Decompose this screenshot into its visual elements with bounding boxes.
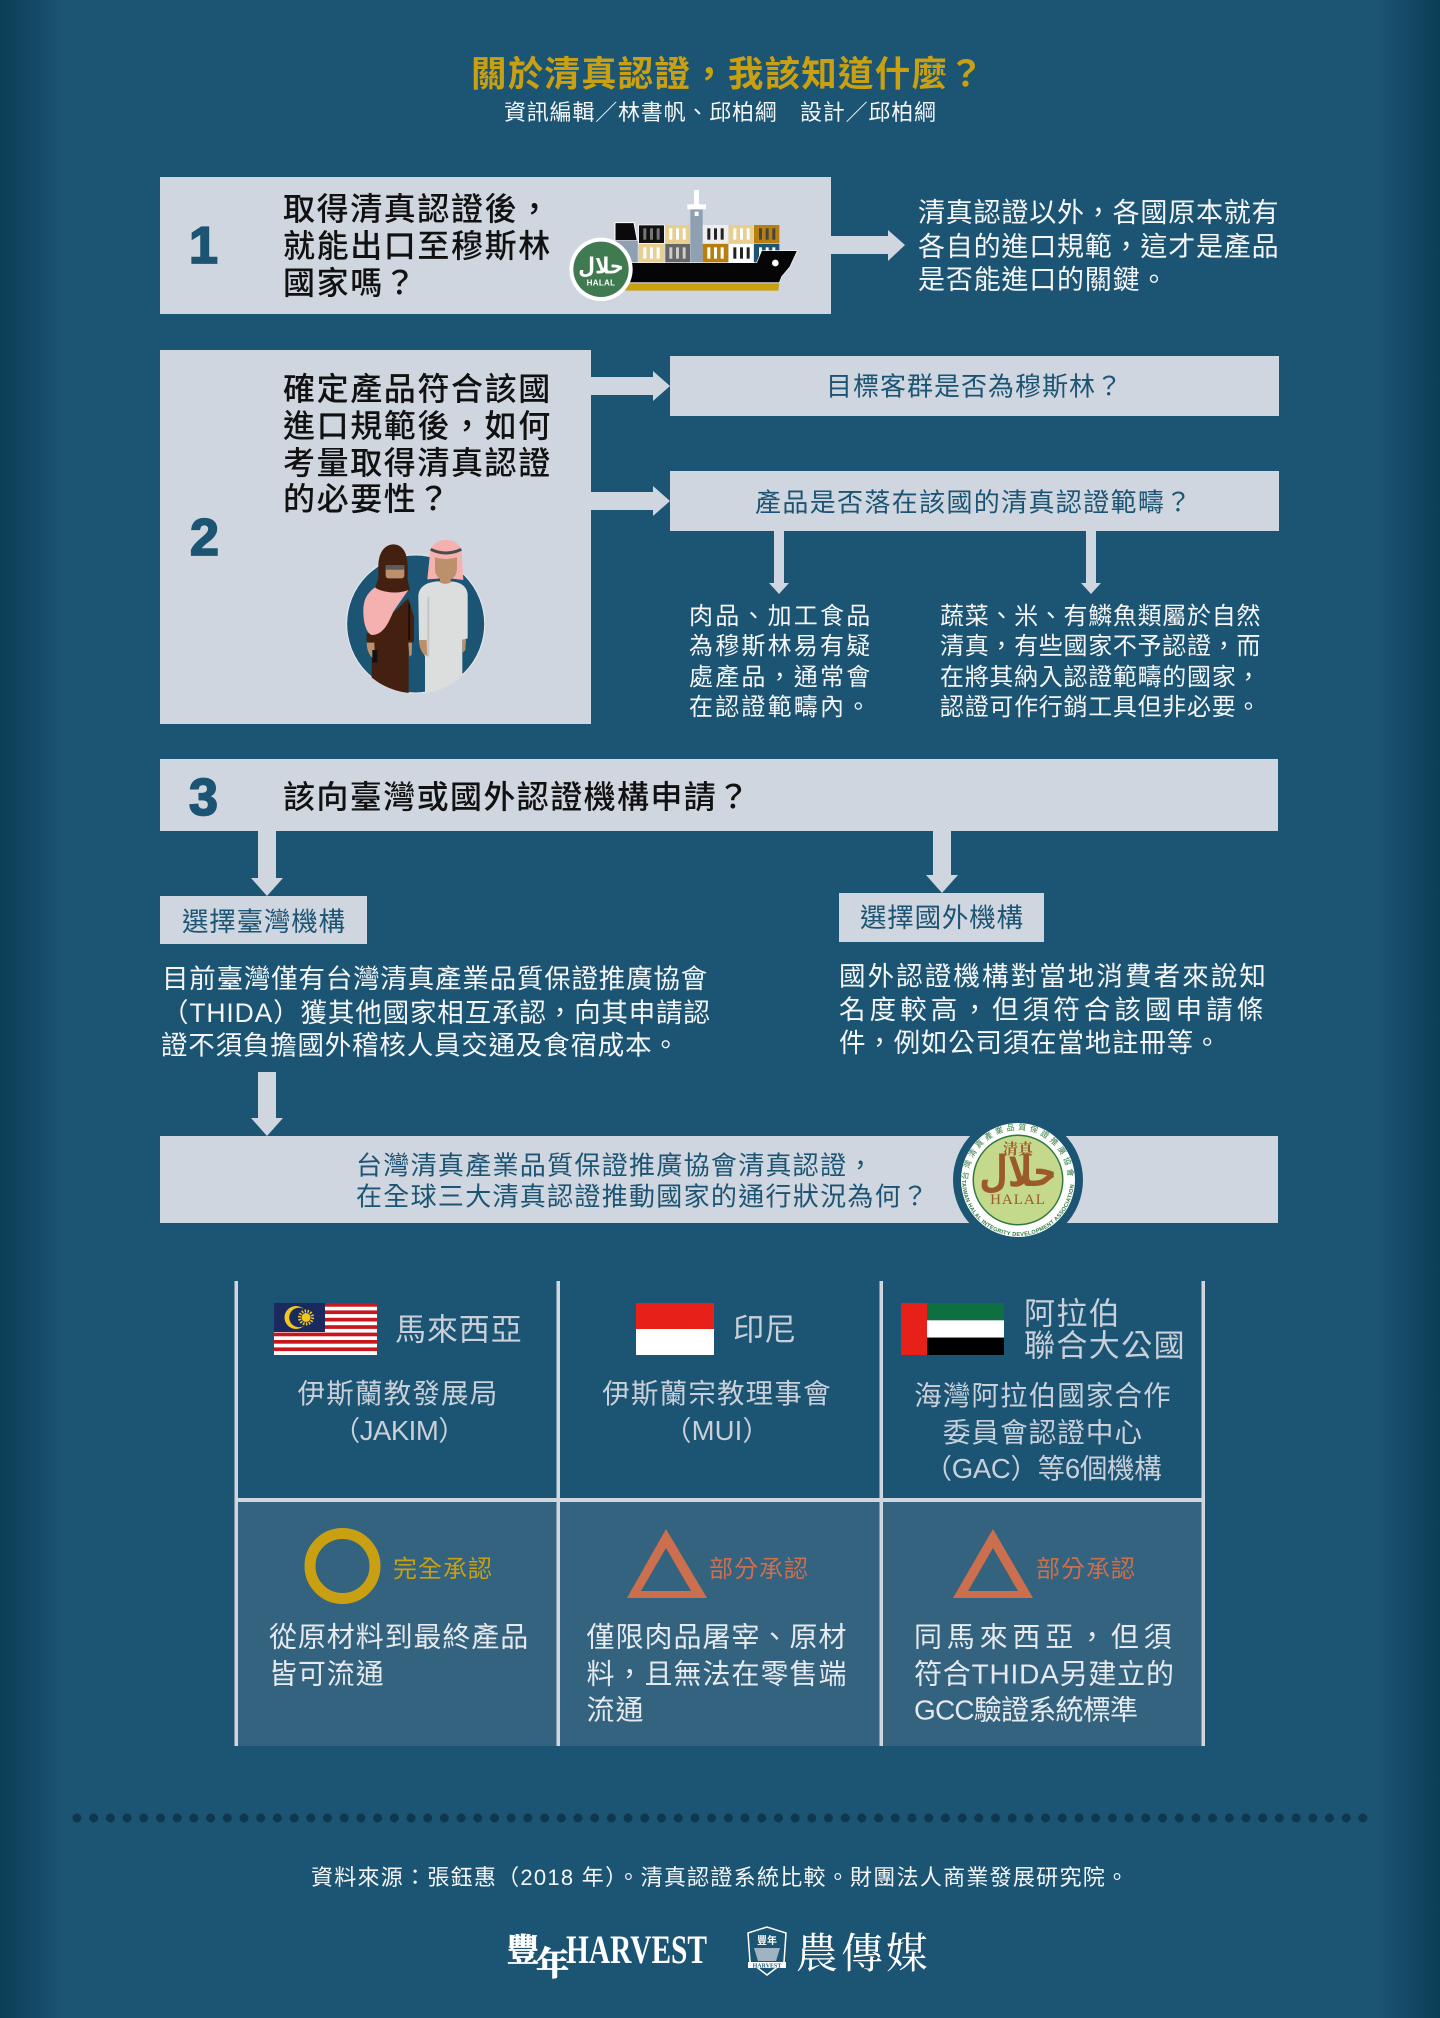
label box: foreign institutions xyxy=(839,893,1044,942)
text: Indonesia recognition: 流通 xyxy=(586,1694,645,1726)
certifier: JAKIM: 伊斯蘭教發展局 xyxy=(298,1378,498,1409)
logo: THIDA halal seal: 台灣清真產業品質保證推廣協會 xyxy=(961,1123,1074,1179)
text: meat products xyxy=(689,603,872,721)
icon: cargo ship with halal badge xyxy=(569,190,797,301)
text: foreign institutions xyxy=(839,962,1268,1058)
question 1 text: 取得清真認證後， xyxy=(283,191,552,227)
question 3 text: 該向臺灣或國外認證機構申請？ xyxy=(283,779,751,815)
title: 關於清真認證，我該知道什麼？ xyxy=(471,54,985,94)
question 2 text xyxy=(283,371,552,517)
certifier: GAC: （GAC）等6個機構 xyxy=(925,1453,1161,1484)
text: Taiwan institutions xyxy=(161,964,710,1060)
flag: Malaysia xyxy=(274,1303,377,1355)
arrow: to target customers xyxy=(591,371,670,401)
byline: 設計／邱柏綱 xyxy=(800,100,937,125)
certifier: GAC: 委員會認證中心 xyxy=(943,1417,1143,1448)
logo: THIDA halal seal: حلال xyxy=(979,1147,1057,1197)
certifier: MUI: 伊斯蘭宗教理事會 xyxy=(602,1378,832,1409)
panel: question 3 xyxy=(160,759,1278,831)
label: partial recognition, UAE: 部分承認 xyxy=(1036,1556,1136,1583)
text: Malaysia recognition xyxy=(269,1622,529,1690)
text: meat products: 處產品，通常會 xyxy=(689,664,872,691)
text: foreign institutions: 國外認證機構對當地消費者來說知 xyxy=(839,962,1268,992)
logo: agricultural media seal and wordmark: 豐年 xyxy=(757,1934,777,1947)
logo: agricultural media seal and wordmark: 農傳媒 xyxy=(796,1921,931,1981)
arrow: down to vegetable text xyxy=(1081,531,1101,594)
answer 1 text: 清真認證以外，各國原本就有 xyxy=(918,198,1279,228)
flag: Indonesia xyxy=(636,1303,714,1355)
answer 1 text xyxy=(918,198,1279,295)
icon: cargo ship with halal badge: HALAL xyxy=(587,278,615,287)
arrow: to foreign institutions xyxy=(926,831,958,893)
arrow: down to meat text xyxy=(769,531,789,594)
icon: full recognition circle xyxy=(310,1534,375,1598)
byline: 資訊編輯／林書帆、邱柏綱 xyxy=(504,100,778,125)
icon: muslim couple xyxy=(347,540,485,695)
box: certification scope xyxy=(670,471,1279,531)
logo: THIDA halal seal: TAIWAN HALAL INTEGRITY DEVELOPMENT ASSOCIATION xyxy=(962,1180,1074,1236)
table: recognition by country xyxy=(234,1281,1205,1746)
certifier: MUI xyxy=(602,1378,832,1446)
certifier: GAC xyxy=(914,1380,1172,1484)
question 1 text: 就能出口至穆斯林 xyxy=(283,228,552,264)
arrow: to THIDA banner xyxy=(251,1072,283,1136)
certifier: MUI: （MUI） xyxy=(664,1415,770,1446)
text: UAE recognition: 符合THIDA另建立的 xyxy=(914,1658,1174,1690)
text: Malaysia recognition: 從原材料到最終產品 xyxy=(269,1622,529,1652)
certifier: GAC: 海灣阿拉伯國家合作 xyxy=(914,1380,1172,1411)
text: UAE recognition: GCC驗證系統標準 xyxy=(914,1694,1138,1726)
label box: foreign institutions: 選擇國外機構 xyxy=(860,903,1024,933)
box: target customers: 目標客群是否為穆斯林？ xyxy=(826,372,1123,402)
banner: THIDA question: 在全球三大清真認證推動國家的通行狀況為何？ xyxy=(356,1182,929,1212)
text: Taiwan institutions: 目前臺灣僅有台灣清真產業品質保證推廣協會 xyxy=(162,964,708,994)
text: Indonesia recognition: 僅限肉品屠宰、原材 xyxy=(586,1622,848,1652)
number 1: 1 xyxy=(189,217,218,275)
panel: question 2 xyxy=(160,350,591,724)
label: Malaysia: 馬來西亞 xyxy=(395,1312,523,1348)
logo: Harvest: 年 xyxy=(536,1938,569,1985)
arrow: to Taiwan institutions xyxy=(251,831,283,896)
box: certification scope: 產品是否落在該國的清真認證範疇？ xyxy=(755,488,1193,518)
label: Indonesia: 印尼 xyxy=(733,1312,797,1348)
label: partial recognition, Indonesia: 部分承認 xyxy=(709,1556,809,1583)
answer 1 text: 各自的進口規範，這才是產品 xyxy=(918,232,1279,262)
logo: THIDA halal seal: HALAL xyxy=(990,1192,1046,1208)
number 3: 3 xyxy=(189,769,218,827)
text: Malaysia recognition: 皆可流通 xyxy=(269,1658,385,1690)
text: meat products: 肉品、加工食品 xyxy=(689,603,872,630)
text: UAE recognition xyxy=(914,1622,1176,1726)
question 2 text: 考量取得清真認證 xyxy=(283,445,552,481)
text: vegetables and others: 認證可作行銷工具但非必要。 xyxy=(940,694,1261,721)
icon: cargo ship with halal badge: حلال xyxy=(578,253,624,279)
logo: Harvest: 豐 xyxy=(507,1925,539,1971)
certifier: JAKIM xyxy=(298,1378,498,1446)
text: Taiwan institutions: 證不須負擔國外稽核人員交通及食宿成本。 xyxy=(161,1030,680,1060)
logo: THIDA halal seal xyxy=(953,1123,1083,1237)
question 1 text xyxy=(283,191,552,301)
question 2 text: 確定產品符合該國 xyxy=(283,371,552,407)
logo: agricultural media seal and wordmark: HARVEST xyxy=(753,1964,781,1970)
text: vegetables and others xyxy=(940,603,1261,721)
question 2 text: 進口規範後，如何 xyxy=(283,408,552,444)
label box: Taiwan institutions: 選擇臺灣機構 xyxy=(182,907,346,937)
label: UAE xyxy=(1024,1296,1186,1364)
label: UAE: 聯合大公國 xyxy=(1024,1328,1186,1364)
banner: THIDA question xyxy=(160,1136,1278,1223)
text: UAE recognition: 同馬來西亞，但須 xyxy=(914,1622,1176,1652)
banner: THIDA question: 台灣清真產業品質保證推廣協會清真認證， xyxy=(356,1150,875,1180)
text: foreign institutions: 名度較高，但須符合該國申請條 xyxy=(839,995,1267,1025)
box: target customers xyxy=(670,356,1279,416)
source note: 資料來源：張鈺惠（2018 年）。清真認證系統比較。財團法人商業發展研究院。 xyxy=(311,1865,1128,1890)
icon: partial recognition triangle, UAE xyxy=(953,1529,1033,1598)
text: Indonesia recognition: 料，且無法在零售端 xyxy=(586,1658,848,1690)
text: Taiwan institutions: （THIDA）獲其他國家相互承認，向其申請認 xyxy=(162,998,710,1028)
label: UAE: 阿拉伯 xyxy=(1024,1296,1121,1332)
text: meat products: 為穆斯林易有疑 xyxy=(689,633,872,660)
panel: question 1 xyxy=(160,177,831,314)
text: vegetables and others: 蔬菜、米、有鱗魚類屬於自然 xyxy=(940,603,1261,630)
label box: Taiwan institutions xyxy=(160,896,367,944)
logo: Harvest xyxy=(507,1925,707,1985)
text: Indonesia recognition xyxy=(586,1622,848,1726)
arrow: question 1 to answer xyxy=(831,230,905,261)
text: foreign institutions: 件，例如公司須在當地註冊等。 xyxy=(839,1028,1221,1058)
flag: UAE xyxy=(901,1303,1004,1355)
logo: Harvest: HARVEST xyxy=(566,1927,707,1972)
text: meat products: 在認證範疇內。 xyxy=(689,694,872,721)
certifier: JAKIM: （JAKIM） xyxy=(333,1415,465,1446)
arrow: to certification scope xyxy=(591,486,670,516)
number 2: 2 xyxy=(190,509,219,567)
logo: THIDA halal seal: 清真 xyxy=(1003,1138,1035,1159)
answer 1 text: 是否能進口的關鍵。 xyxy=(918,265,1168,295)
question 2 text: 的必要性？ xyxy=(283,481,451,517)
text: vegetables and others: 在將其納入認證範疇的國家， xyxy=(940,664,1261,691)
text: vegetables and others: 清真，有些國家不予認證，而 xyxy=(940,633,1261,660)
label: full recognition: 完全承認 xyxy=(393,1556,493,1583)
question 1 text: 國家嗎？ xyxy=(283,265,417,301)
icon: partial recognition triangle, Indonesia xyxy=(627,1529,707,1598)
